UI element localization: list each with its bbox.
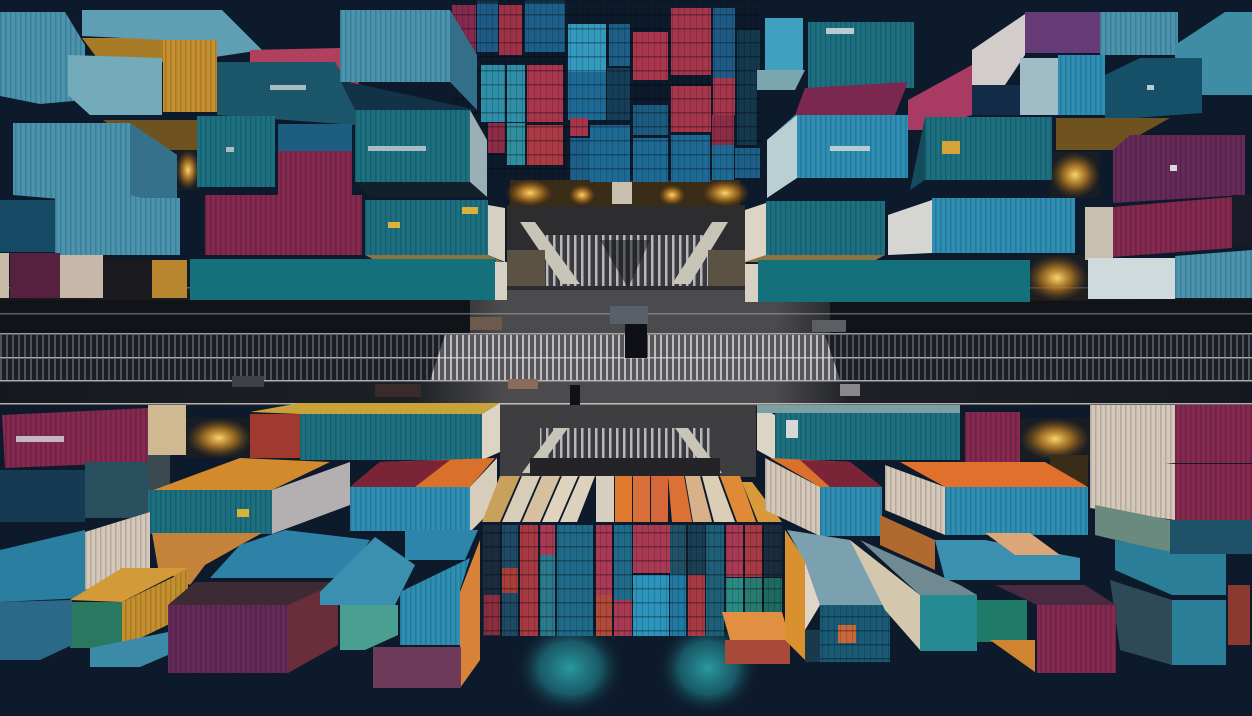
container: blue mid right — [1115, 540, 1226, 595]
container: light steel — [68, 55, 162, 115]
top left containers — [0, 10, 507, 300]
upper yard with crane ladder — [507, 205, 746, 290]
container labels — [826, 28, 1177, 171]
container: long blue — [13, 123, 177, 207]
bottom centre orange and cream lids — [482, 476, 782, 522]
bottom quay teal glows — [514, 620, 760, 716]
container: grey and bright blue — [1020, 55, 1105, 115]
container: teal with cream end — [365, 200, 505, 263]
container: blue and cream lid — [935, 533, 1080, 580]
container: orange lid and red low centre — [722, 612, 790, 664]
container: grey green end — [1095, 505, 1170, 553]
container: small blue low — [90, 632, 168, 667]
container: navy and light blue — [0, 198, 180, 255]
container: corner blue right — [1175, 12, 1252, 95]
lower yard with crane ladder — [500, 405, 756, 477]
container: green and gold — [70, 568, 188, 648]
container: orange flat — [152, 533, 262, 585]
container: wide teal — [190, 259, 507, 300]
container: dark teal centre — [355, 110, 487, 197]
container: crimson right — [1113, 197, 1232, 257]
container: orange side with small stack — [785, 530, 890, 662]
container: blue lid orange red — [765, 458, 882, 536]
container: dark teal — [217, 62, 355, 125]
container: mauve low — [373, 647, 461, 688]
container: sea green — [340, 605, 398, 650]
container: crimson under teal — [795, 82, 908, 115]
container: blue lid — [320, 537, 415, 605]
bottom right containers — [757, 405, 1252, 673]
container: gold — [163, 40, 217, 112]
container: crimson left — [2, 408, 148, 468]
container: dark teal right — [910, 117, 1052, 190]
container: teal square — [197, 116, 275, 187]
container: pink behind — [250, 48, 372, 108]
container: purple right — [1113, 135, 1245, 203]
container: pink diagonal — [908, 65, 972, 130]
top centre container stacks — [452, 0, 762, 182]
container: teal with cream end row 1 — [745, 201, 885, 263]
container: cream and crimson lower — [1090, 455, 1252, 520]
container: cream side teal and green — [850, 540, 1027, 651]
container: navy behind — [972, 85, 1022, 115]
top edge vignette — [0, 0, 1252, 4]
container: cream end — [148, 405, 186, 455]
container: rust edge — [1228, 585, 1250, 645]
container: bright blue large — [767, 115, 908, 198]
central road and rail tracks — [0, 287, 1252, 406]
container: blue flat lid — [210, 530, 370, 578]
container: dark blue — [1105, 58, 1202, 118]
container: teal with orange lid — [148, 458, 350, 534]
container: row of mixed colours — [0, 253, 187, 298]
container: brown end — [880, 515, 935, 570]
container: blue with orange lid — [350, 458, 497, 532]
bottom centre container stacks — [483, 525, 782, 636]
container: cream and purple — [972, 12, 1100, 88]
container: teal with cream end — [757, 405, 960, 460]
container: blue and orange — [400, 540, 480, 688]
container: teal top — [808, 22, 914, 88]
container: blue top right — [1100, 12, 1178, 55]
container: light blue small — [757, 18, 805, 90]
container: pale and blue — [1088, 250, 1252, 299]
container: purple low — [168, 582, 338, 673]
container: red and teal long — [250, 403, 500, 460]
container: light teal large — [340, 10, 477, 110]
container: wide orange lid blue — [885, 462, 1088, 535]
container: crimson small — [965, 412, 1020, 462]
road vehicles — [232, 306, 860, 409]
amber yard lights — [103, 118, 1170, 485]
container: cream end — [1085, 207, 1113, 260]
container: cream and crimson upper — [1090, 405, 1252, 463]
container: corner blue — [0, 12, 85, 104]
container: small blue under — [405, 530, 478, 560]
container: bright row 2 — [888, 198, 1075, 255]
top right containers — [745, 12, 1252, 302]
container: dark navy pair — [0, 455, 170, 522]
container: purple lower right — [990, 585, 1116, 673]
container: wide teal right — [745, 260, 1030, 302]
container: blue corner — [0, 600, 72, 660]
container labels — [226, 85, 478, 228]
container: crimson and navy pair — [278, 124, 352, 195]
container: grey and blue lower — [1110, 580, 1226, 665]
bottom left containers — [0, 403, 500, 688]
container: yellow with blue lid — [82, 10, 262, 62]
container: crimson long — [205, 195, 362, 255]
container: blue and cream left — [0, 512, 150, 602]
